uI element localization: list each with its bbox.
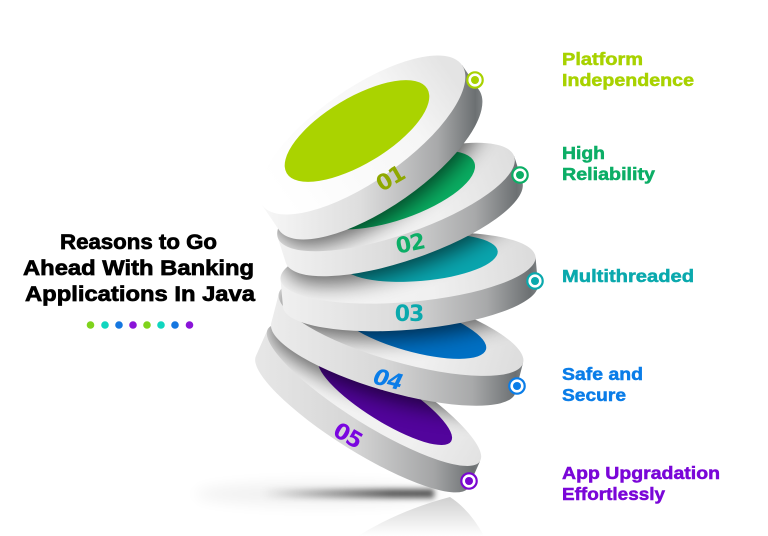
label: App Upgradation Effortlessly: Effortlessly — [562, 484, 665, 504]
disc 3 side — [280, 257, 538, 331]
disc 5 purple inset — [308, 341, 462, 459]
marker 2 — [512, 167, 528, 183]
marker 3 — [527, 273, 543, 289]
disc 4 blue inset — [330, 284, 492, 372]
disc 4 cast shadow — [278, 289, 503, 356]
label: Platform Independence: Independence — [562, 70, 694, 90]
disc 1 side — [262, 65, 482, 240]
label: App Upgradation Effortlessly: App Upgradation — [562, 463, 720, 483]
marker 5 — [461, 473, 477, 489]
disc 3 top face — [278, 223, 538, 313]
disc 5 top face — [252, 303, 496, 487]
marker 4 — [509, 378, 525, 394]
disc 5 side — [255, 329, 480, 492]
label: Safe and Secure: Secure — [562, 385, 626, 405]
ground shadow — [195, 482, 445, 506]
number 04: 04 — [371, 365, 405, 396]
disc 1 lime inset — [270, 60, 444, 202]
title: Applications In Java — [25, 283, 255, 306]
title — [23, 231, 255, 306]
disc 3 cast shadow — [280, 233, 507, 300]
disc 2 top face — [265, 120, 527, 274]
disc 4 — [271, 289, 524, 406]
disc 4 top face — [270, 260, 532, 396]
label: Safe and Secure — [562, 364, 643, 405]
title: Ahead With Banking — [23, 257, 254, 280]
label: Platform Independence — [562, 49, 694, 90]
disc 2 cast shadow — [277, 142, 490, 252]
label: High Reliability — [562, 143, 655, 184]
label: Safe and Secure: Safe and — [562, 364, 643, 384]
number 01: 01 — [372, 161, 409, 197]
marker 1 — [467, 72, 483, 88]
label: Multithreaded: Multithreaded — [562, 266, 694, 286]
disc 2 side — [278, 156, 523, 276]
label: High Reliability: Reliability — [562, 164, 655, 184]
disc 2 green inset — [306, 134, 484, 246]
label: App Upgradation Effortlessly — [562, 463, 720, 504]
disc 3 — [280, 233, 537, 332]
disc 3 teal inset — [340, 228, 500, 288]
title: Reasons to Go — [60, 231, 217, 254]
number 05: 05 — [329, 418, 366, 454]
disc 2 — [277, 142, 523, 276]
disc reflection — [358, 497, 484, 536]
disc 1 top face — [236, 27, 488, 243]
disc 1 — [236, 27, 488, 243]
label: Platform Independence: Platform — [562, 49, 643, 69]
disc 4 side — [271, 293, 523, 406]
number 03: 03 — [395, 302, 423, 327]
number 02: 02 — [394, 229, 427, 260]
disc 5 — [255, 326, 482, 492]
dot row — [87, 321, 193, 329]
disc 5 cast shadow — [266, 326, 464, 428]
label: High Reliability: High — [562, 143, 605, 163]
